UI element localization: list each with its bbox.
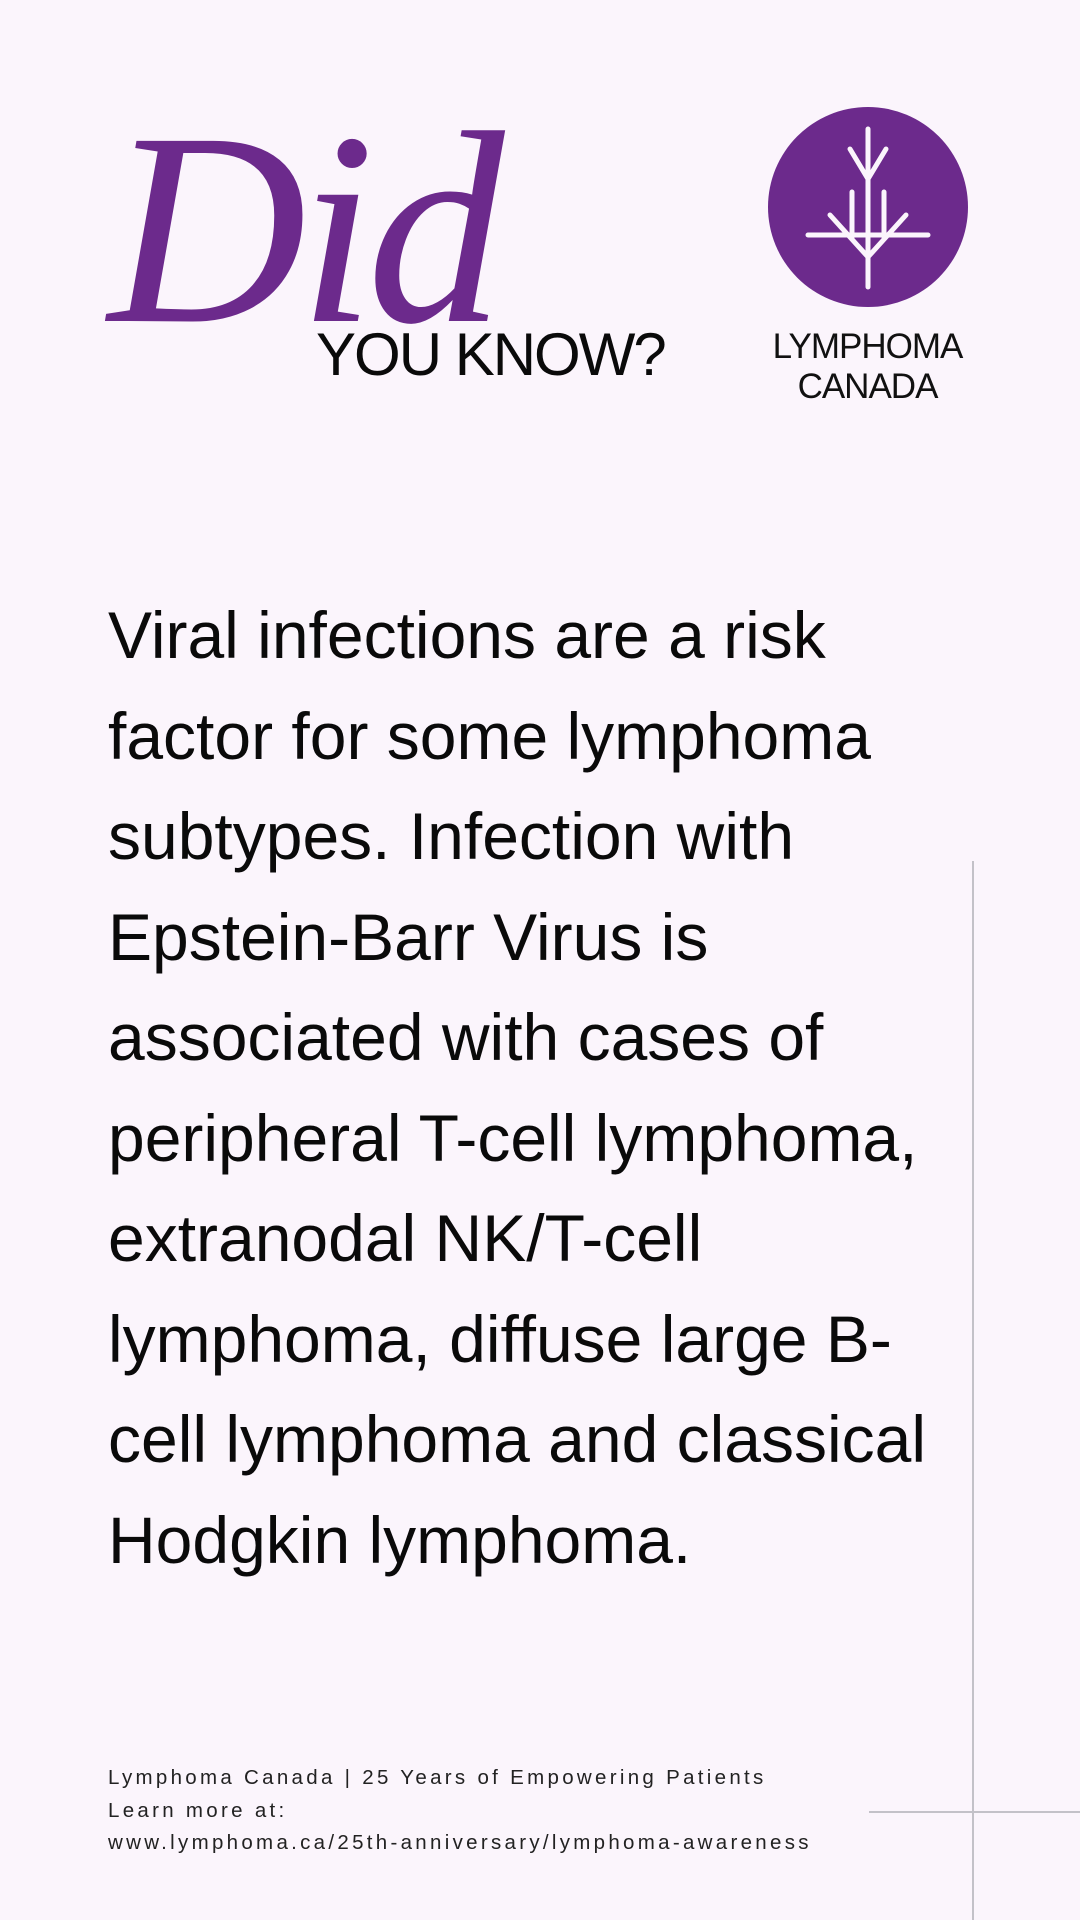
main text block: lymphoma, diffuse large B- bbox=[108, 1302, 892, 1376]
icon: tree in circle bbox=[768, 107, 968, 307]
main text block: Viral infections are a risk bbox=[108, 598, 826, 672]
main text block: extranodal NK/T-cell bbox=[108, 1201, 702, 1275]
decorative vertical line bbox=[972, 861, 974, 1920]
logo text: LYMPHOMA bbox=[773, 327, 962, 366]
subtitle: YOU KNOW?: YOU KNOW? bbox=[316, 321, 665, 388]
script word: Did: Did bbox=[108, 77, 496, 381]
main text block: Epstein-Barr Virus is bbox=[108, 900, 708, 974]
logo text bbox=[773, 327, 964, 406]
logo text: CANADA bbox=[798, 367, 937, 406]
main text block: subtypes. Infection with bbox=[108, 799, 794, 873]
title: Did you know bbox=[104, 77, 665, 388]
footer text: www.lymphoma.ca/25th-anniversary/lymphoma-awareness bbox=[108, 1831, 812, 1854]
main text block: associated with cases of bbox=[108, 1000, 823, 1074]
logo: Lymphoma Canada bbox=[768, 107, 968, 406]
main text block: peripheral T-cell lymphoma, bbox=[108, 1100, 917, 1174]
footer text: Lymphoma Canada | 25 Years of Empowering Patients bbox=[108, 1766, 767, 1789]
decorative horizontal line bbox=[869, 1811, 1080, 1813]
main text block: cell lymphoma and classical bbox=[108, 1402, 926, 1476]
main text block bbox=[108, 598, 926, 1576]
main text block: factor for some lymphoma bbox=[108, 698, 871, 772]
footer text bbox=[108, 1766, 812, 1854]
main text block: Hodgkin lymphoma. bbox=[108, 1502, 691, 1576]
footer text: Learn more at: bbox=[108, 1798, 288, 1822]
